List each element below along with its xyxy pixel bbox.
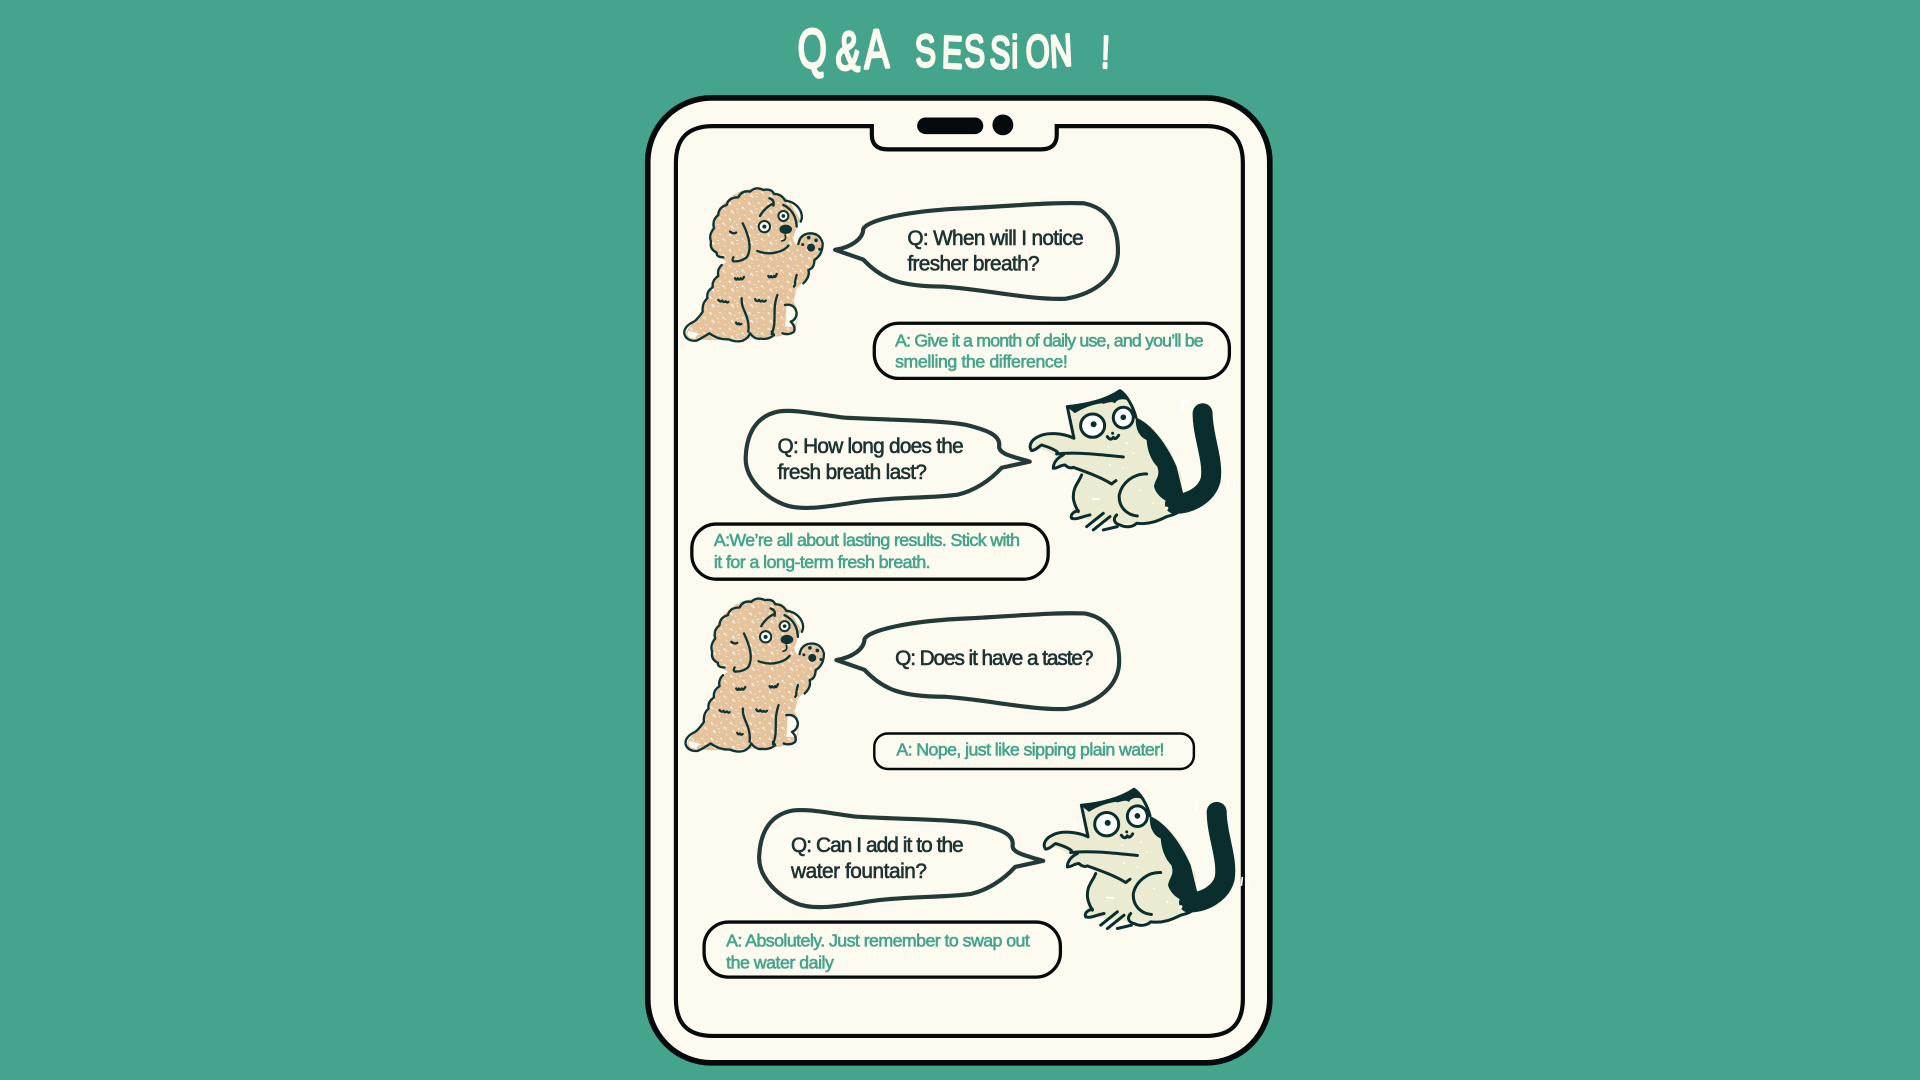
answer bubble 1: smelling the difference! bbox=[895, 351, 1068, 371]
notch camera bbox=[992, 114, 1013, 135]
answer bubble 2 bbox=[692, 524, 1048, 579]
icon: cat 1 bbox=[1030, 390, 1234, 530]
answer bubble 1 bbox=[874, 323, 1229, 378]
answer bubble 3: A: Nope, just like sipping plain water! bbox=[896, 740, 1164, 760]
question bubble 2: fresh breath last? bbox=[778, 461, 927, 484]
answer bubble 1: A: Give it a month of daily use, and you’ll be bbox=[895, 331, 1204, 351]
answer bubble 2: it for a long-term fresh breath. bbox=[714, 552, 931, 572]
answer bubble 4: A: Absolutely. Just remember to swap out bbox=[726, 931, 1030, 951]
question bubble 4: water fountain? bbox=[790, 860, 927, 883]
question bubble 4: Q: Can I add it to the bbox=[791, 834, 964, 857]
notch speaker bbox=[917, 118, 983, 134]
title: SESSiON ! bbox=[914, 25, 1111, 79]
question bubble 1: fresher breath? bbox=[907, 253, 1040, 276]
phone body bbox=[648, 98, 1270, 1063]
title: Q&A bbox=[797, 16, 890, 83]
answer bubble 2: A:We’re all about lasting results. Stick with bbox=[714, 530, 1020, 550]
question bubble 2: Q: How long does the bbox=[778, 435, 964, 458]
question bubble 3 bbox=[836, 613, 1119, 709]
question bubble 4 bbox=[759, 810, 1043, 907]
phone screen with notch bbox=[676, 126, 1243, 1036]
question bubble 1: Q: When will I notice bbox=[907, 227, 1084, 250]
question bubble 1 bbox=[835, 203, 1118, 299]
title bbox=[797, 16, 1111, 83]
icon: dog 2 bbox=[686, 599, 824, 752]
icon: dog 1 bbox=[684, 188, 823, 341]
question bubble 2 bbox=[746, 411, 1030, 508]
question bubble 3: Q: Does it have a taste? bbox=[895, 647, 1093, 670]
answer bubble 4: the water daily bbox=[726, 953, 834, 973]
icon: cat 2 bbox=[1044, 789, 1248, 929]
answer bubble 3 bbox=[874, 733, 1194, 769]
answer bubble 4 bbox=[704, 922, 1060, 977]
